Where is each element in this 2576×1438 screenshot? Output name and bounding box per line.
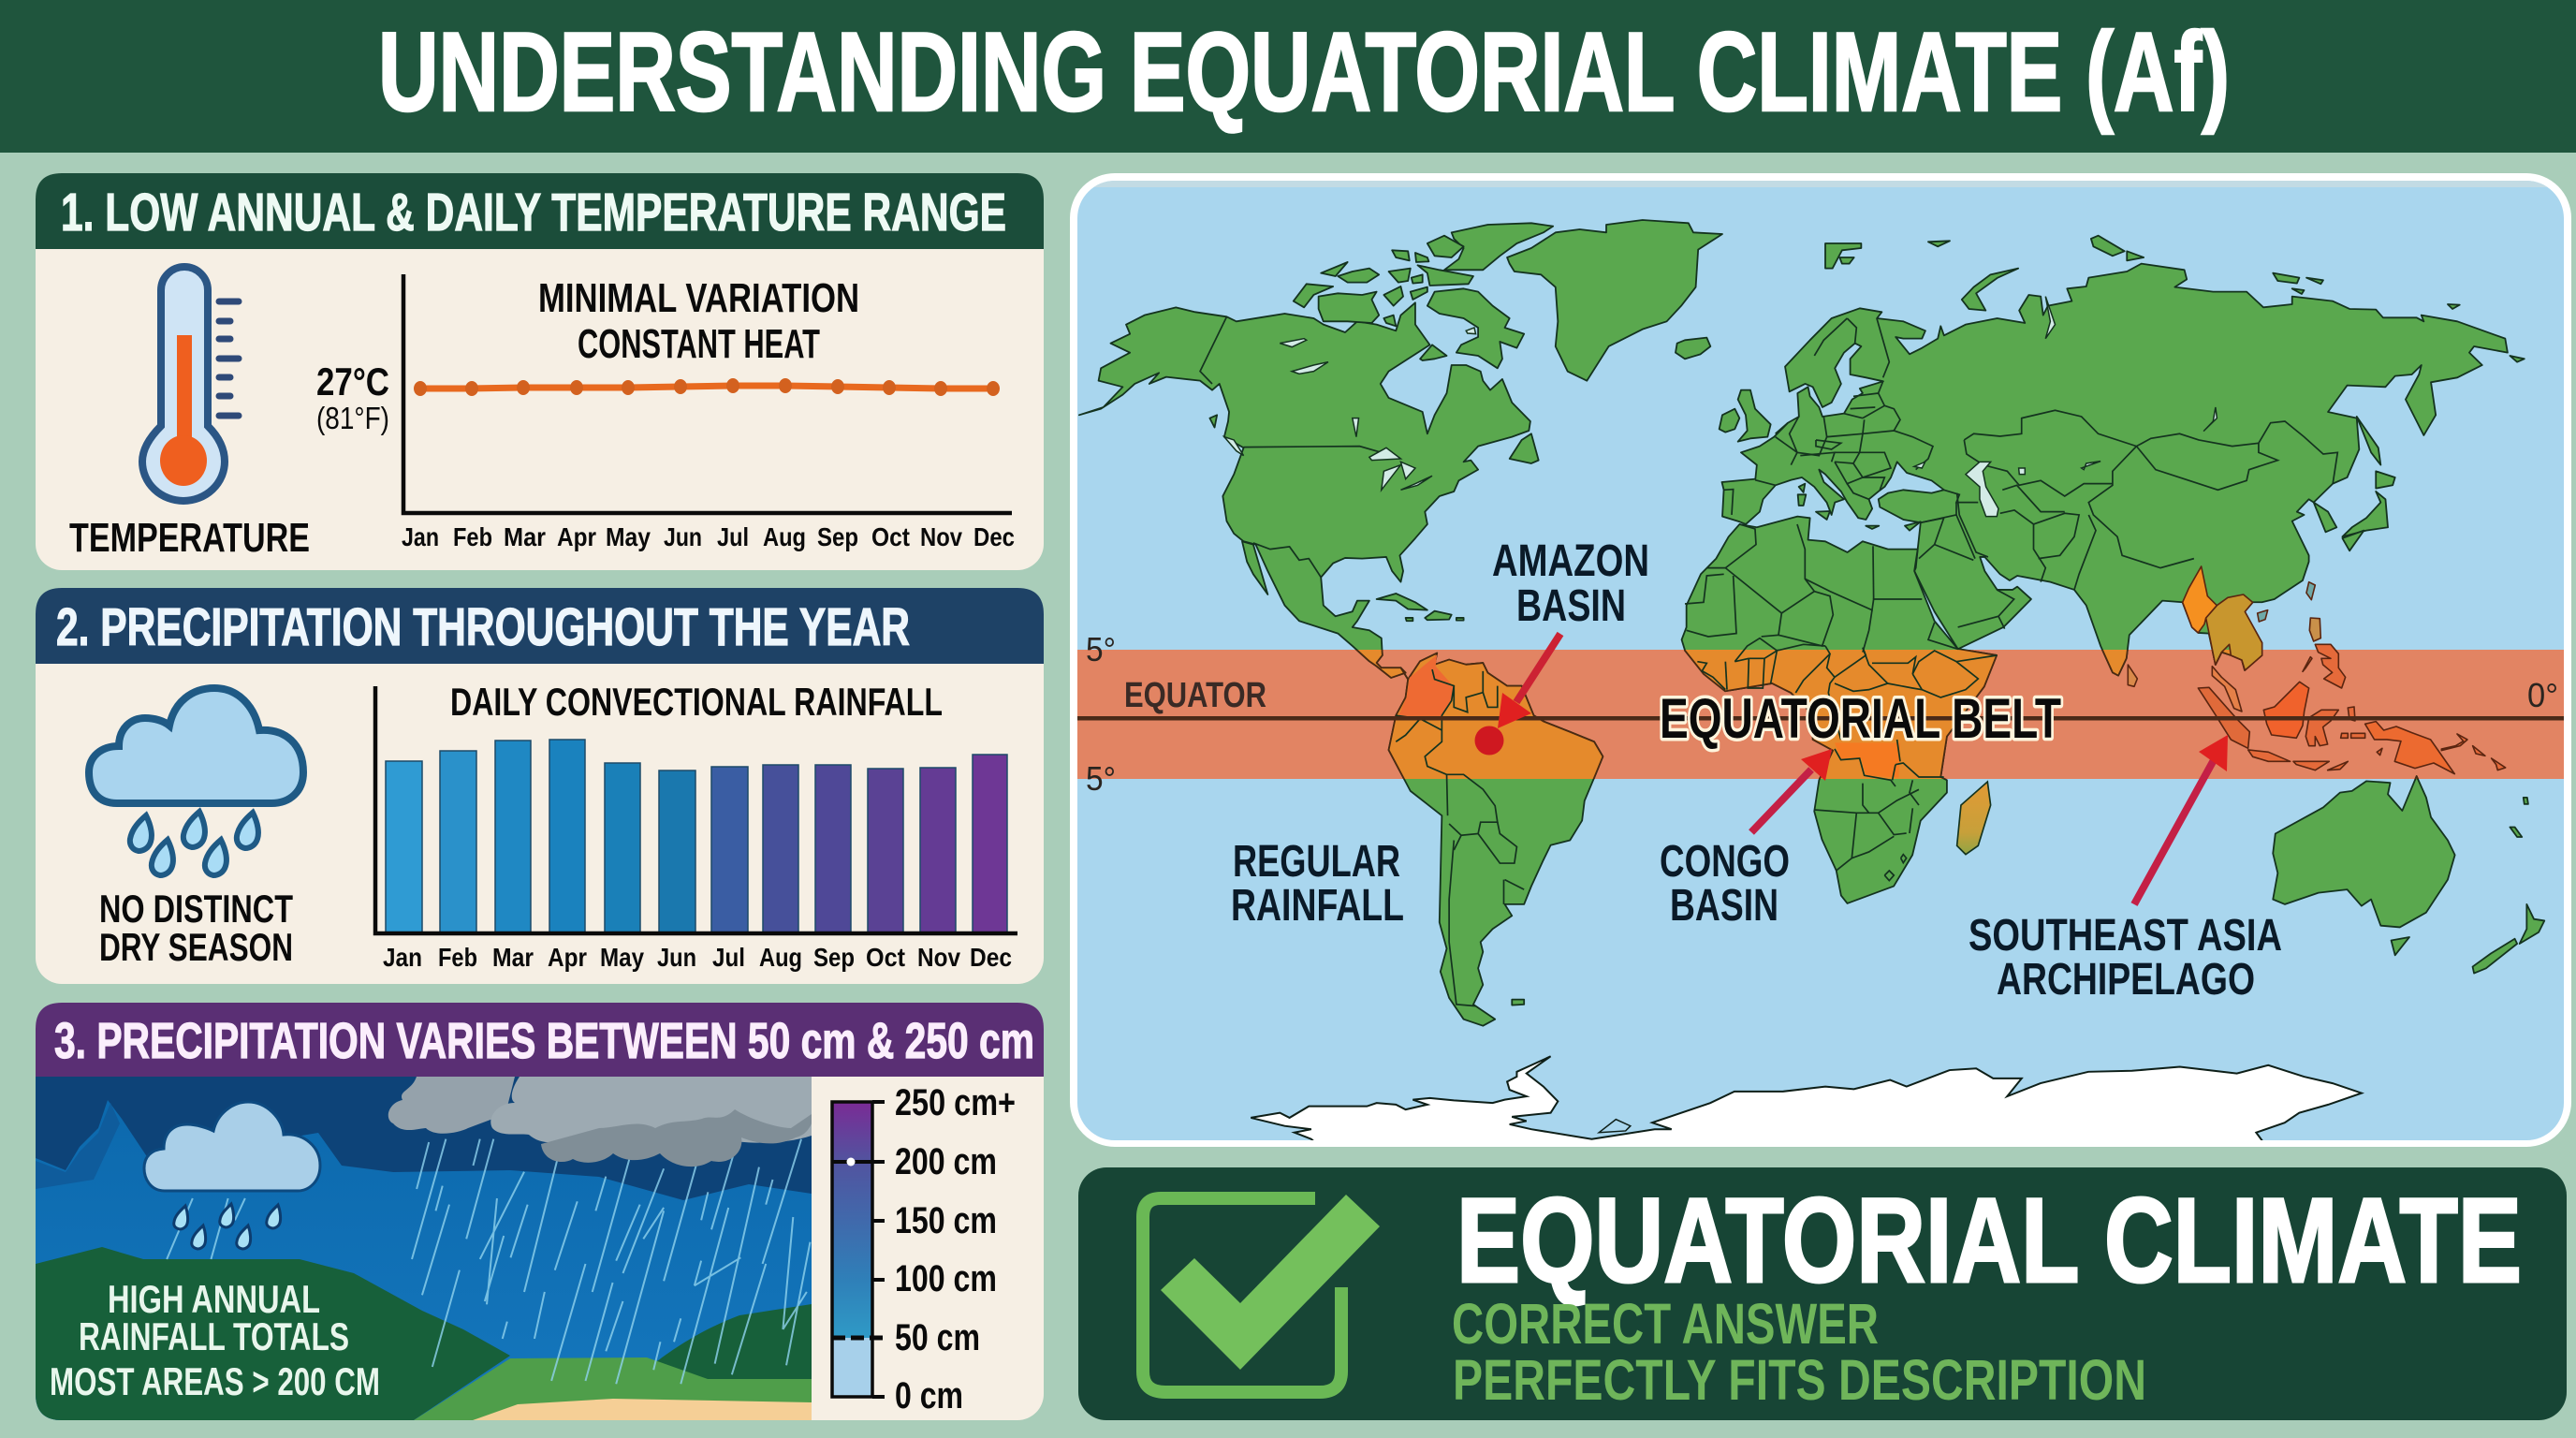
rainfall totals text: HIGH ANNUAL <box>108 1277 320 1321</box>
panel 3 header: 3. PRECIPITATION VARIES BETWEEN 50 cm & 250 cm <box>54 1013 1034 1069</box>
legend: rainfall scale: 0 cm <box>895 1375 963 1416</box>
panel 2 header <box>36 588 1044 664</box>
panel 1 header: 1. LOW ANNUAL & DAILY TEMPERATURE RANGE <box>61 183 1006 242</box>
bar chart: daily convectional rainfall: Jul <box>712 943 745 972</box>
legend: rainfall scale: 50 cm <box>895 1317 980 1358</box>
line chart: monthly temperature: Oct <box>871 522 910 551</box>
latitude labels: 5° <box>1086 630 1116 668</box>
line chart: monthly temperature: Nov <box>920 522 962 551</box>
small light cloud <box>144 1102 320 1191</box>
latitude labels: 0° <box>2527 676 2558 714</box>
front grey storm cloud <box>490 1077 812 1143</box>
callout: Congo Basin: CONGO <box>1660 837 1790 887</box>
line chart: monthly temperature: Feb <box>453 522 492 551</box>
answer subtext: CORRECT ANSWER <box>1452 1292 1879 1356</box>
bar chart: daily convectional rainfall: DAILY CONVECTIONAL RAINFALL <box>450 680 943 724</box>
bar chart: daily convectional rainfall: Jun <box>657 943 696 972</box>
bar chart: daily convectional rainfall: Sep <box>813 943 855 972</box>
icon: check box <box>1143 1195 1380 1392</box>
legend: rainfall scale: 150 cm <box>895 1200 997 1241</box>
callout: Southeast Asia Archipelago <box>1969 735 2282 1005</box>
line chart: monthly temperature: (81°F) <box>316 401 389 435</box>
callout: Congo Basin: BASIN <box>1670 881 1778 931</box>
no distinct dry season label: NO DISTINCT <box>99 887 293 931</box>
callout: Amazon Basin <box>1475 536 1649 755</box>
legend: rainfall scale <box>832 1082 1016 1416</box>
panel: temperature range <box>36 173 1044 570</box>
panel: world map <box>1074 177 2568 1146</box>
callout: Amazon Basin: BASIN <box>1516 581 1626 631</box>
dark right hill <box>657 1304 812 1379</box>
answer subtext <box>1452 1292 2146 1412</box>
callout: Southeast Asia Archipelago: SOUTHEAST ASIA <box>1969 911 2282 961</box>
darker cloud underside <box>541 1109 812 1167</box>
line chart: monthly temperature: Jul <box>717 522 749 551</box>
panel: answer banner <box>1078 1167 2567 1420</box>
Antarctica <box>1251 1056 2362 1146</box>
continents <box>1079 220 2544 1026</box>
Southeast Asia countries and islands <box>2128 566 2506 774</box>
callout: Southeast Asia Archipelago: ARCHIPELAGO <box>1997 955 2255 1005</box>
bar chart: daily convectional rainfall: May <box>600 943 644 972</box>
panel: precipitation throughout the year <box>36 588 1044 984</box>
callout: Congo Basin <box>1660 749 1832 931</box>
latitude labels: 5° <box>1086 759 1116 798</box>
bar chart: daily convectional rainfall: Oct <box>866 943 905 972</box>
national borders <box>1200 316 2337 1006</box>
panel 3 header <box>36 1003 1044 1077</box>
bar chart: daily convectional rainfall: Feb <box>438 943 477 972</box>
rainfall totals text: MOST AREAS > 200 CM <box>50 1359 380 1403</box>
icon: rain cloud <box>89 688 303 875</box>
latitude labels <box>1086 630 2558 798</box>
continents inside the belt <box>1079 220 2544 1026</box>
Madagascar <box>1957 782 1991 855</box>
panel 1 header <box>36 173 1044 249</box>
bar chart: daily convectional rainfall <box>375 680 1017 972</box>
rainfall totals text: RAINFALL TOTALS <box>79 1314 349 1358</box>
hot spot overlays <box>1398 654 1900 778</box>
ocean <box>1077 181 2564 1140</box>
line chart: monthly temperature: May <box>606 522 651 551</box>
rain streaks <box>167 1139 810 1384</box>
no distinct dry season label: DRY SEASON <box>99 925 293 969</box>
panel 2 header: 2. PRECIPITATION THROUGHOUT THE YEAR <box>56 597 910 657</box>
bar chart: daily convectional rainfall: Dec <box>970 943 1012 972</box>
bar chart: daily convectional rainfall: Aug <box>759 943 802 972</box>
no distinct dry season label <box>99 887 293 969</box>
legend: rainfall scale: 100 cm <box>895 1258 997 1299</box>
bar chart: daily convectional rainfall: Nov <box>917 943 960 972</box>
icon: thermometer <box>142 267 239 501</box>
line chart: monthly temperature: Jan <box>402 522 439 551</box>
line chart: monthly temperature: Mar <box>504 522 546 551</box>
rainfall totals text <box>51 1285 378 1395</box>
line chart: monthly temperature: CONSTANT HEAT <box>578 321 820 367</box>
callout: Amazon Basin: AMAZON <box>1492 536 1649 586</box>
lakes and inland seas <box>1224 297 2217 517</box>
equator line <box>1075 716 2566 721</box>
back grey storm cloud <box>388 1077 515 1134</box>
line chart: monthly temperature <box>316 274 1015 551</box>
line chart: monthly temperature: MINIMAL VARIATION <box>538 275 859 321</box>
light green hill <box>414 1357 812 1420</box>
regular rainfall label <box>1231 837 1404 931</box>
equator label: EQUATOR <box>1124 676 1266 715</box>
line chart: monthly temperature: Jun <box>664 522 702 551</box>
sand shore <box>473 1399 812 1420</box>
line chart: monthly temperature: Dec <box>973 522 1015 551</box>
regular rainfall label: REGULAR <box>1233 837 1400 887</box>
line chart: monthly temperature: 27°C <box>316 360 389 404</box>
answer subtext: PERFECTLY FITS DESCRIPTION <box>1453 1348 2146 1412</box>
bar chart: daily convectional rainfall: Jan <box>383 943 422 972</box>
dark left hill <box>36 1247 510 1420</box>
panel: precipitation range <box>36 1003 1044 1420</box>
small raindrops <box>174 1204 281 1249</box>
line chart: monthly temperature: Apr <box>557 522 596 551</box>
line chart: monthly temperature: Sep <box>817 522 858 551</box>
regular rainfall label: RAINFALL <box>1231 881 1404 931</box>
line chart: monthly temperature: Aug <box>763 522 806 551</box>
temperature icon label: TEMPERATURE <box>69 515 310 561</box>
legend: rainfall scale: 250 cm+ <box>895 1082 1016 1123</box>
bar chart: daily convectional rainfall: Apr <box>548 943 587 972</box>
equatorial belt label: EQUATORIAL BELT <box>1660 687 2061 750</box>
equatorial belt band <box>1075 650 2566 779</box>
bar chart: daily convectional rainfall: Mar <box>492 943 534 972</box>
rain scene illustration <box>36 1077 812 1420</box>
legend: rainfall scale: 200 cm <box>895 1141 997 1182</box>
